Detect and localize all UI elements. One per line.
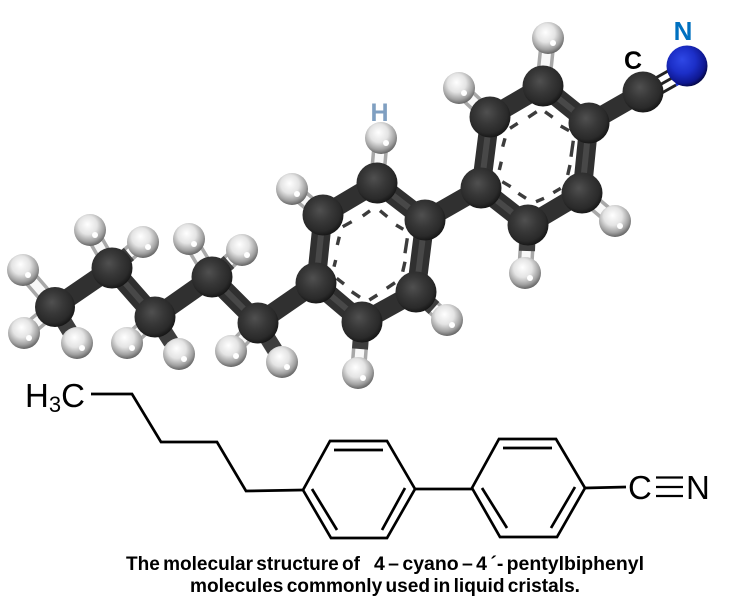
skeletal structural formula: [25, 377, 710, 538]
aromatic dashed ring: left: [334, 211, 407, 300]
caption line 2: molecules commonly used in liquid cristals.: [190, 576, 580, 597]
H3C group label: 3: [49, 392, 61, 417]
caption line 1: 4 – cyano – 4 ´- pentylbiphenyl: [374, 554, 644, 575]
pentyl chain and biphenyl rings: [91, 394, 626, 538]
hydrogen atoms: [7, 22, 631, 389]
caption line 1: The molecular structure of: [126, 554, 361, 575]
3D ball-and-stick molecular model: [7, 22, 708, 389]
atom label: C: C: [624, 47, 642, 75]
caption: [126, 554, 644, 597]
atom label: H: H: [370, 99, 389, 127]
aromatic dashed ring: right: [499, 112, 573, 202]
nitrogen atom: [666, 46, 708, 86]
carbon-hydrogen bonds: [23, 38, 615, 373]
cyano label C: C: [628, 469, 652, 506]
triple bond: [656, 478, 683, 496]
H3C group label: C: [61, 377, 85, 414]
hydrogen highlights: [25, 40, 623, 381]
carbon atoms: [35, 66, 664, 344]
H3C group label: H: [25, 377, 49, 414]
cyano label N: N: [686, 469, 710, 506]
carbon-carbon bonds: [55, 86, 643, 323]
cyano triple bond: [652, 65, 686, 94]
atom label: N: N: [674, 16, 692, 46]
